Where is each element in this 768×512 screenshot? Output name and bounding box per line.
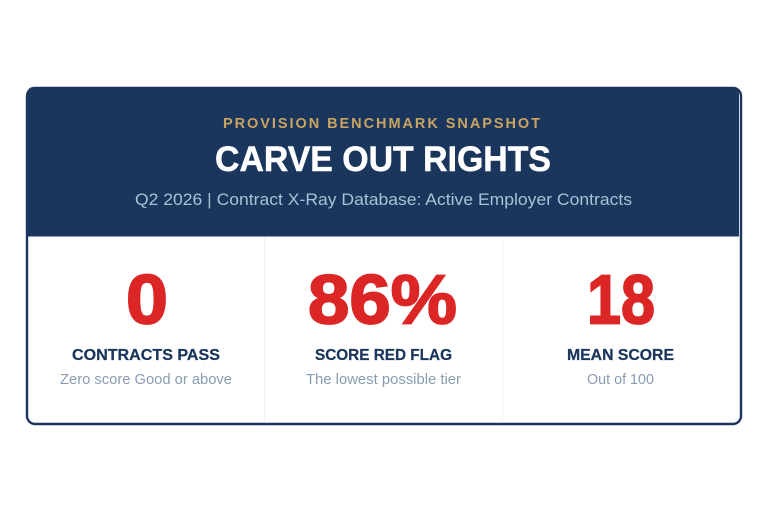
panel: score red flag stat xyxy=(306,260,461,388)
eyebrow heading: PROVISION BENCHMARK SNAPSHOT xyxy=(223,116,540,132)
stat note: Zero score Good or above xyxy=(60,371,232,388)
column divider xyxy=(264,237,265,421)
stat note: Out of 100 xyxy=(587,371,654,388)
panel: benchmark card xyxy=(27,87,741,424)
stat number: 86% xyxy=(308,260,457,338)
panel: header band xyxy=(28,87,739,236)
card background and border xyxy=(27,88,741,424)
stat note: The lowest possible tier xyxy=(306,371,461,388)
subtitle: Q2 2026 | Contract X-Ray Database: Active Employer Contracts xyxy=(135,190,632,209)
title: CARVE OUT RIGHTS xyxy=(215,139,551,179)
stat number: 18 xyxy=(587,260,655,338)
stat label: MEAN SCORE xyxy=(567,347,674,364)
panel: mean score stat xyxy=(567,260,674,388)
panel: contracts pass stat xyxy=(60,260,232,388)
stat label: SCORE RED FLAG xyxy=(315,347,452,364)
stat label: CONTRACTS PASS xyxy=(72,347,220,364)
stat number: 0 xyxy=(126,260,168,338)
column divider xyxy=(502,237,503,421)
